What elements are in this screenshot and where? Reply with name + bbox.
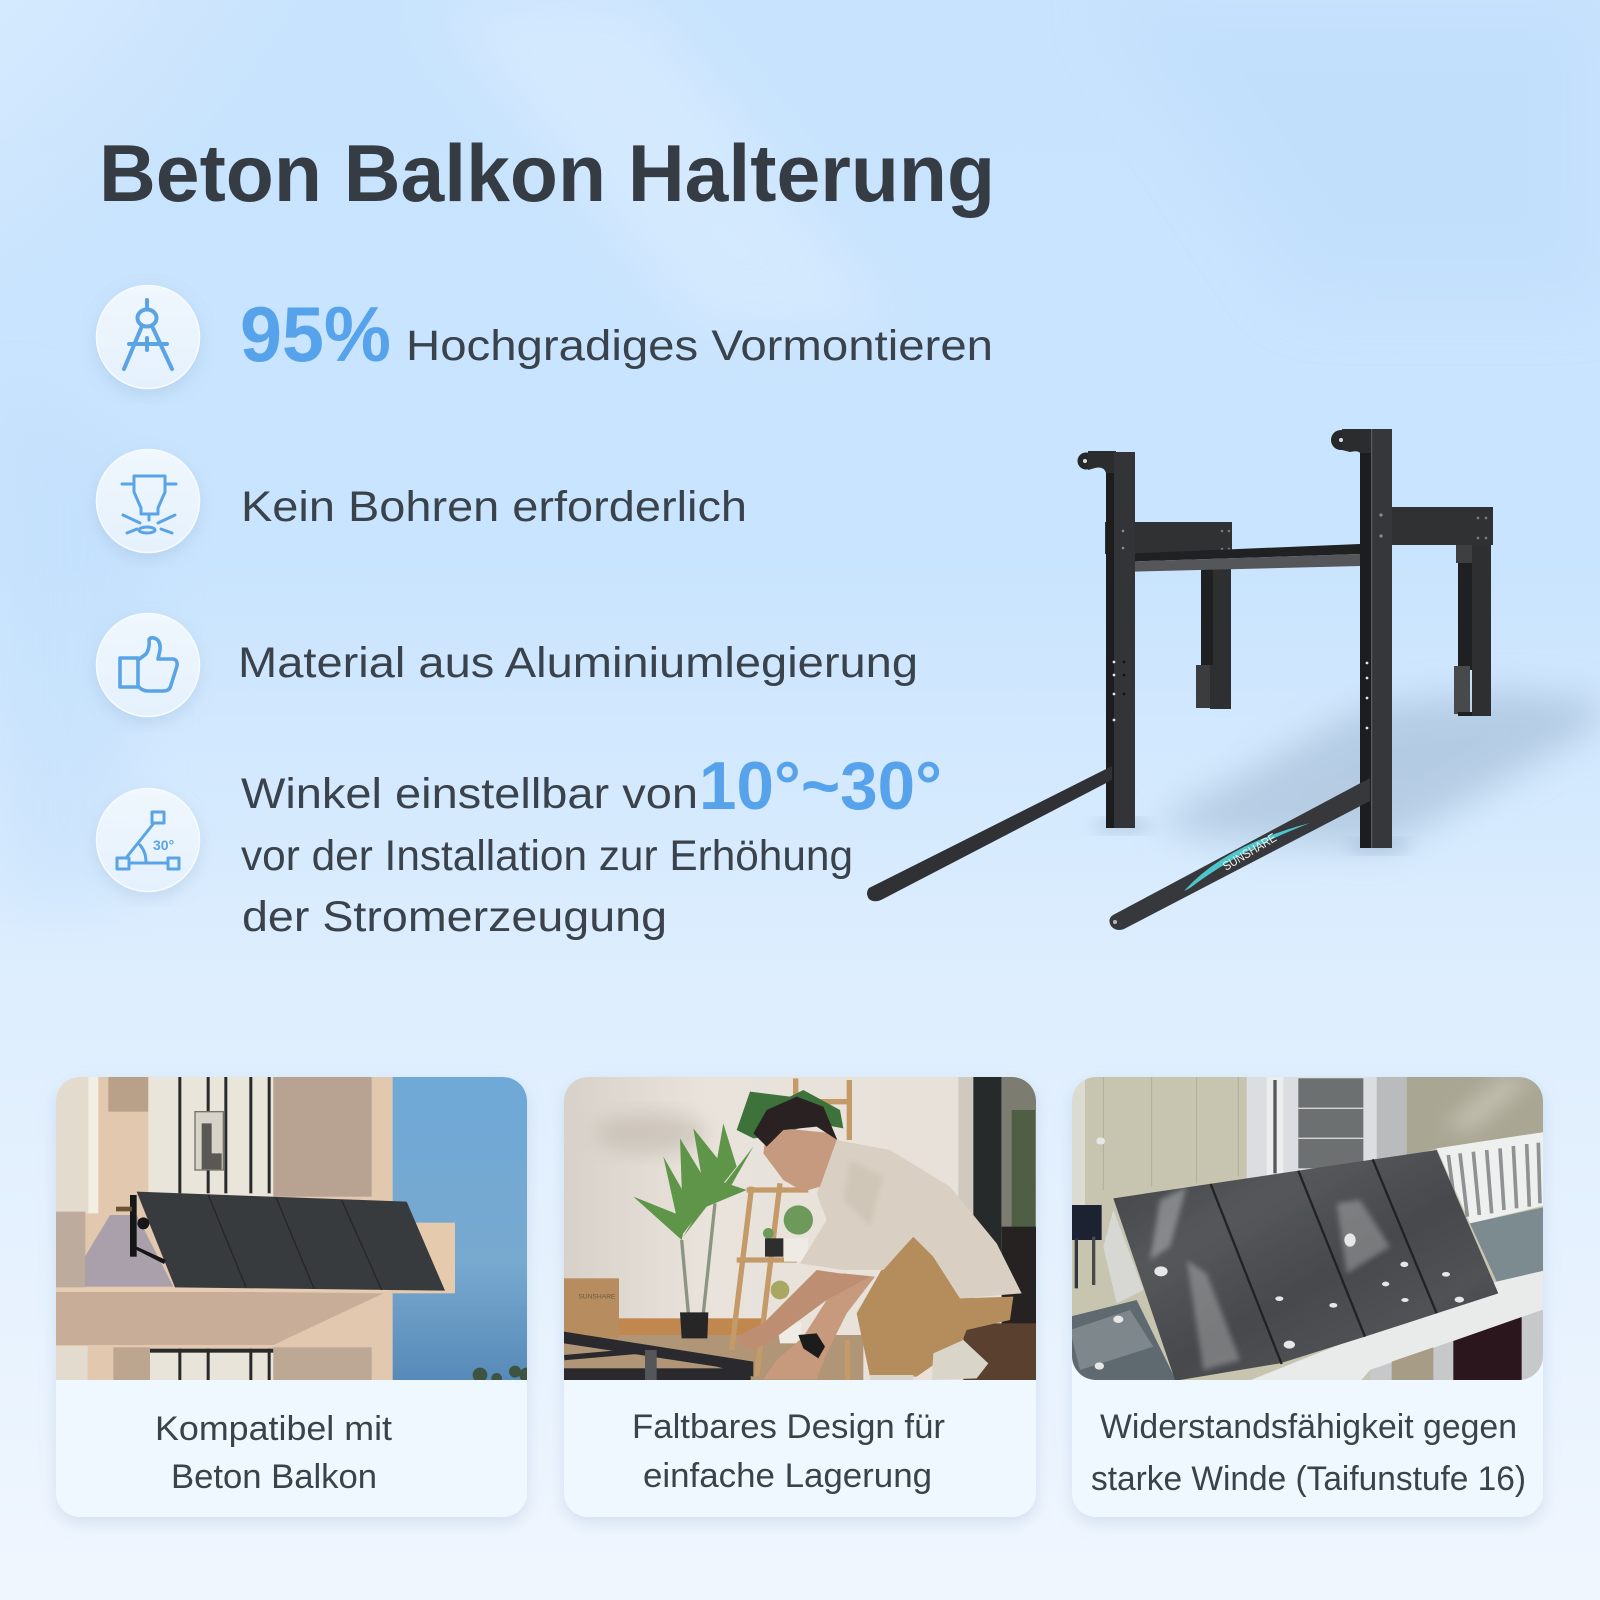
feature row: aluminium material <box>96 614 918 716</box>
feature text: angle line 1: Winkel einstellbar von <box>241 770 698 818</box>
feature row: no drilling <box>96 450 747 552</box>
crossbar <box>1118 544 1360 572</box>
photo: man assembling foldable frame: SUNSHARE <box>578 1293 616 1300</box>
feature row: pre-assembly <box>96 286 993 388</box>
caption: concrete balcony: Beton Balkon <box>171 1458 377 1496</box>
feature text: angle line 3: der Stromerzeugung <box>242 893 667 941</box>
card: foldable design <box>563 1077 1040 1517</box>
caption: foldable design: einfache Lagerung <box>643 1457 932 1495</box>
right support strut with logo: SUNSHARE <box>1220 831 1279 874</box>
icon: thumbs up <box>96 614 200 716</box>
bracket floor shadow <box>1155 690 1600 848</box>
left post <box>1106 452 1135 828</box>
icon: angle 30 degrees: 30° <box>153 837 174 853</box>
rear leg right <box>1454 545 1491 716</box>
photo: panels on concrete balcony <box>53 1077 534 1384</box>
icon: compass <box>96 286 200 388</box>
highlight: 95%: 95% <box>240 290 391 378</box>
card: wind resistance <box>1070 1077 1547 1517</box>
right post <box>1360 429 1392 848</box>
caption: wind resistance: starke Winde (Taifunstufe 16) <box>1091 1460 1526 1498</box>
left support strut <box>867 766 1112 901</box>
title: Beton Balkon Halterung <box>99 129 995 219</box>
highlight: 10 to 30 degrees: 10°~30° <box>699 748 942 824</box>
icon: drill <box>96 450 200 552</box>
photo: man assembling foldable frame <box>563 1077 1040 1383</box>
photo: panels in storm <box>1070 1077 1547 1383</box>
feature row: adjustable angle <box>96 748 942 941</box>
caption: foldable design <box>632 1408 945 1495</box>
feature text: pre-assembly: Hochgradiges Vormontieren <box>406 322 993 370</box>
top arm right <box>1331 429 1493 545</box>
card: concrete balcony <box>53 1077 534 1517</box>
icon: angle 30 degrees <box>96 788 200 892</box>
feature text: angle line 2: vor der Installation zur Erhöhung <box>241 832 853 880</box>
feature text: no drilling: Kein Bohren erforderlich <box>241 483 747 531</box>
caption: concrete balcony: Kompatibel mit <box>155 1410 393 1448</box>
right support strut with logo <box>1109 778 1370 930</box>
top arm left <box>1078 451 1232 554</box>
caption: foldable design: Faltbares Design für <box>632 1408 945 1446</box>
product: balcony bracket <box>867 429 1600 930</box>
caption: concrete balcony <box>155 1410 393 1496</box>
caption: wind resistance <box>1091 1408 1526 1498</box>
rear leg left <box>1196 568 1231 709</box>
feature text: aluminium material: Material aus Aluminiumlegierung <box>238 639 918 687</box>
caption: wind resistance: Widerstandsfähigkeit gegen <box>1100 1408 1517 1446</box>
